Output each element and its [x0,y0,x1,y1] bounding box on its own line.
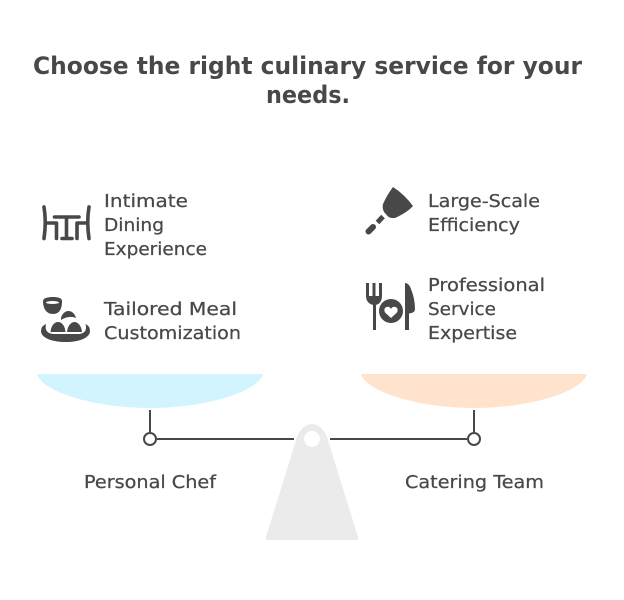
text: tailored meal customization: Customization [104,323,241,344]
title: Choose the right culinary service for your [33,52,582,80]
text: professional service expertise: Professional [428,275,545,296]
text: intimate dining experience: Experience [104,239,207,260]
icon: table and chairs [44,207,89,238]
scale fulcrum [266,424,358,540]
text: large-scale efficiency: Efficiency [428,215,520,236]
title: needs. [266,81,350,109]
text: tailored meal customization [103,299,241,344]
text: intimate dining experience: Intimate [104,191,188,212]
panel: catering team pan [361,374,587,408]
panel: personal chef pan [37,374,263,408]
text: large-scale efficiency: Large-Scale [428,191,540,212]
title [33,52,582,109]
text: intimate dining experience [104,191,207,260]
text: professional service expertise: Service [428,299,496,320]
label: catering team: Catering Team [405,472,544,493]
scale beam and hangers [144,410,480,445]
text: professional service expertise [428,275,545,344]
text: professional service expertise: Expertise [428,323,517,344]
text: intimate dining experience: Dining [104,215,164,236]
icon: fork, plate and knife [366,283,415,330]
text: tailored meal customization: Tailored Meal [103,299,237,320]
icon: bowl and plate of food [41,297,90,342]
text: large-scale efficiency [428,191,540,236]
icon: spatula [368,187,413,232]
label: personal chef: Personal Chef [84,472,217,493]
